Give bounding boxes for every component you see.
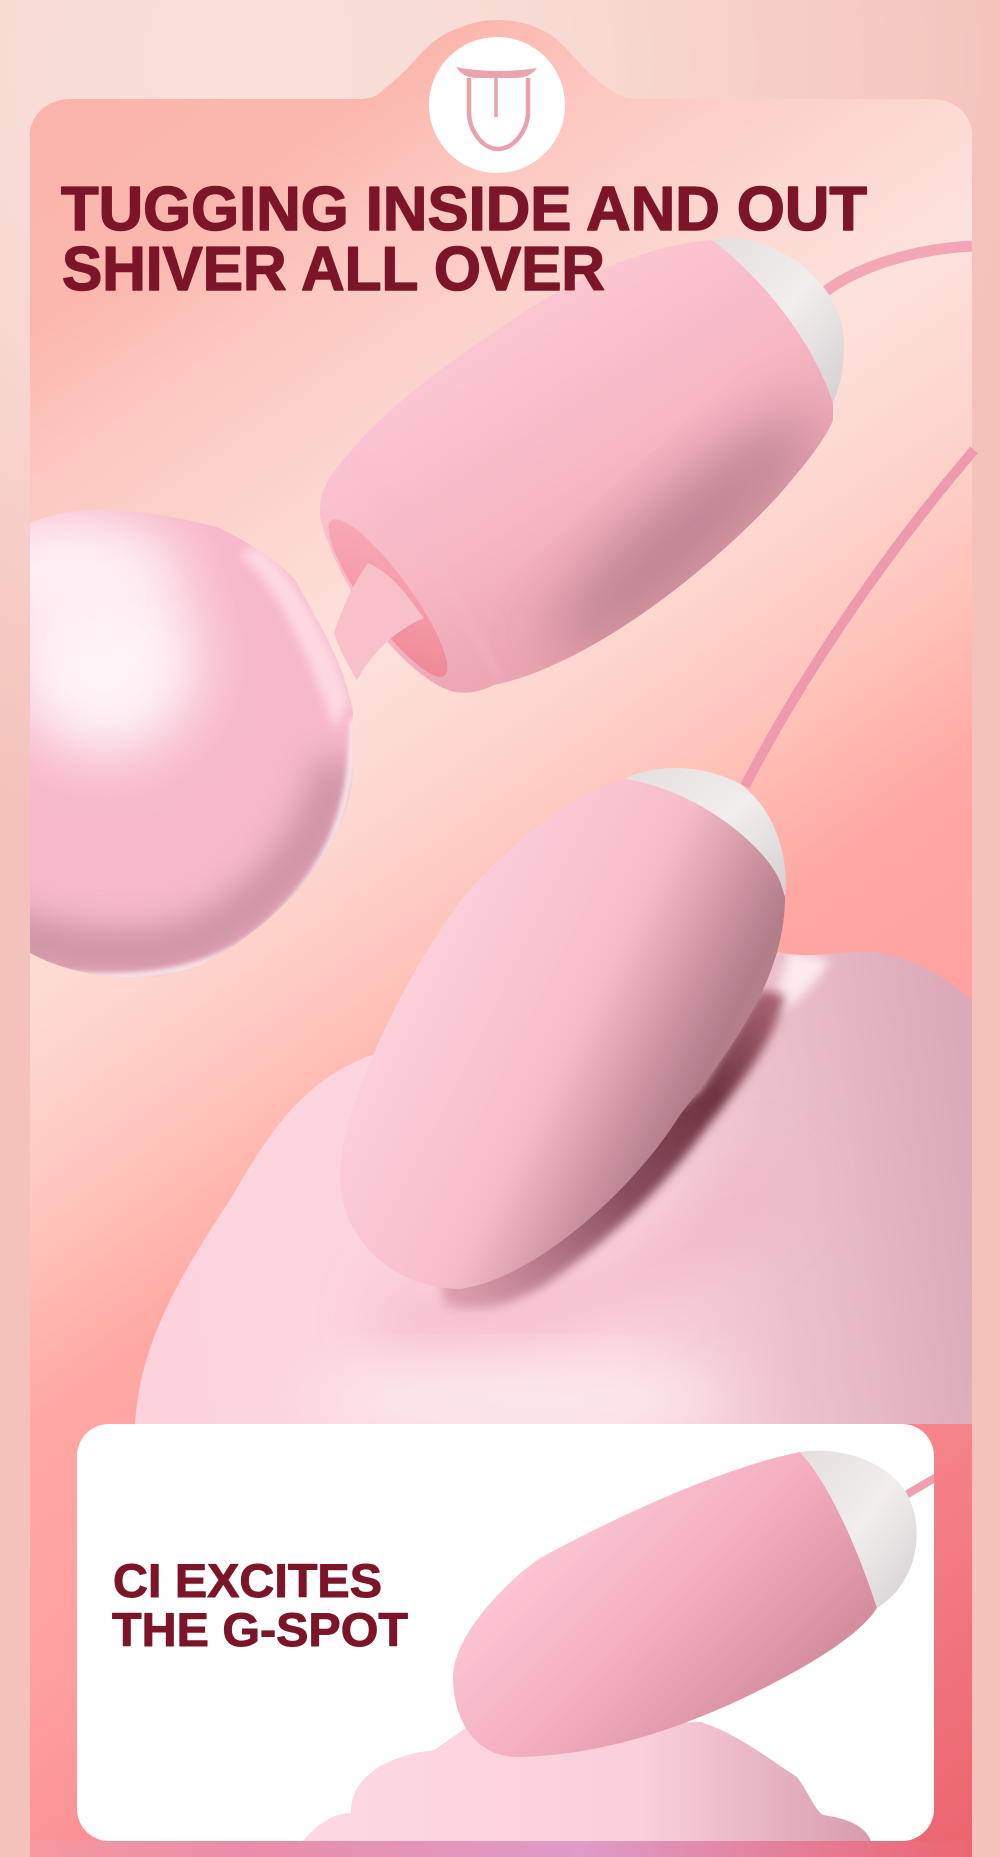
shadow: crease under lower egg: [440, 990, 785, 1309]
product: card wire: [906, 1476, 938, 1495]
product: upper egg: [313, 238, 844, 693]
panel: white inset card: [77, 1424, 938, 1841]
heading: main title: [61, 175, 867, 304]
icon: tongue badge: [429, 37, 565, 173]
heading: main title: TUGGING INSIDE AND OUT: [61, 175, 867, 244]
heading: card heading: [112, 1554, 408, 1656]
strip: reflection under card: [30, 1841, 972, 1857]
product: left blob: [0, 510, 353, 978]
heading: card heading: CI EXCITES: [113, 1554, 382, 1607]
wire: lower cable: [745, 450, 974, 786]
product: tongue tip: [334, 563, 424, 680]
product: card egg: [453, 1451, 917, 1757]
product: soft base form: [135, 950, 972, 1430]
product: egg white cap: [712, 238, 844, 403]
heading: card heading: THE G-SPOT: [112, 1603, 408, 1656]
heading: main title: SHIVER ALL OVER: [62, 235, 605, 304]
product: tongue strip: [334, 563, 424, 680]
product: lower egg white cap: [625, 768, 786, 897]
product: card egg white cap: [800, 1451, 917, 1608]
wire: upper cable: [826, 246, 972, 291]
product: egg opening: [313, 507, 463, 689]
product: card pedestal: [303, 1722, 871, 1841]
product: lower egg: [340, 768, 786, 1289]
